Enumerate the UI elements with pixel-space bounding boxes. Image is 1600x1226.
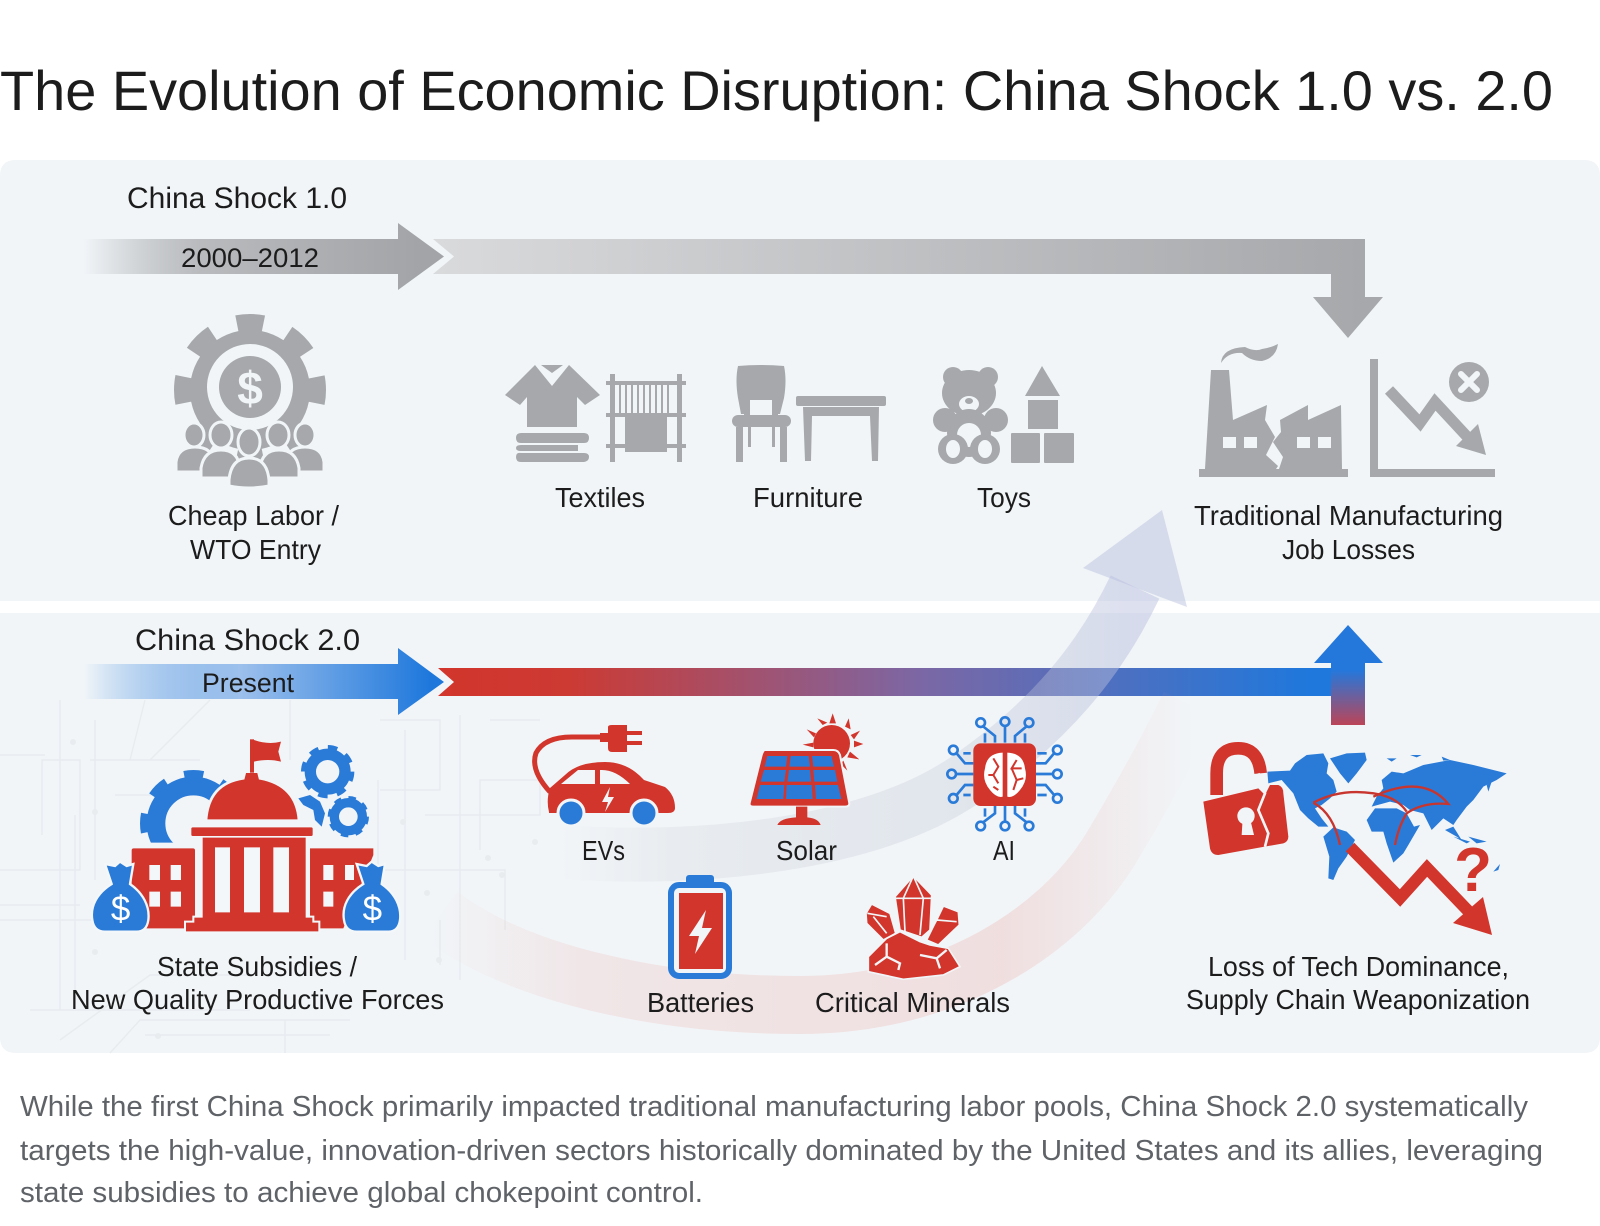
label: Loss of Tech Dominance, Supply Chain Weaponization: Loss of Tech Dominance,	[1208, 951, 1509, 982]
icon: textiles	[505, 365, 686, 462]
label: Cheap Labor / WTO Entry: Cheap Labor /	[168, 500, 339, 531]
icon: state building, gears and money bags: $	[363, 890, 382, 929]
arrow: faint red curve into tech dominance	[440, 705, 1190, 1005]
caption text: targets the high-value, innovation-driven sectors historically dominated by the United States and its allies, leveraging	[20, 1135, 1543, 1167]
icon: AI chip with brain	[947, 717, 1062, 830]
caption text: state subsidies to achieve global chokepoint control.	[20, 1177, 703, 1209]
heading: China Shock 1.0: China Shock 1.0	[127, 182, 347, 215]
label: Furniture: Furniture	[753, 482, 863, 513]
icon: falling red arrow with question mark	[1350, 836, 1492, 935]
label: Solar: Solar	[776, 835, 837, 866]
icon: falling red arrow with question mark: ?	[1454, 836, 1492, 905]
icon: solar panel and sun	[750, 713, 863, 825]
label: EVs: EVs	[582, 835, 625, 866]
arrow: 2000–2012 timeline: 2000–2012	[181, 243, 319, 273]
label: Toys: Toys	[977, 482, 1031, 513]
arrow: blue Present timeline	[84, 648, 444, 715]
icon: gear, dollar and workers	[176, 324, 324, 488]
title: The Evolution of Economic Disruption: China Shock 1.0 vs. 2.0	[0, 59, 1553, 122]
icon: electric car	[535, 725, 675, 826]
icon: battery	[671, 875, 729, 976]
label: Loss of Tech Dominance, Supply Chain Weaponization: Supply Chain Weaponization	[1186, 984, 1530, 1015]
arrow: 2000–2012 timeline	[84, 223, 444, 290]
arrow: grey band to job losses	[433, 239, 1383, 338]
icon: state building, gears and money bags: $	[111, 890, 130, 929]
icon: world map with routes	[1267, 753, 1507, 880]
heading: China Shock 2.0: China Shock 2.0	[135, 624, 360, 657]
label: Cheap Labor / WTO Entry: WTO Entry	[190, 534, 321, 565]
label: Traditional Manufacturing Job Losses: Traditional Manufacturing	[1194, 500, 1503, 531]
label: Textiles: Textiles	[555, 482, 645, 513]
label: Traditional Manufacturing Job Losses	[1194, 500, 1503, 565]
arrow: red to blue band rising to tech dominance	[438, 625, 1383, 725]
label: Batteries: Batteries	[647, 987, 754, 1018]
label: AI: AI	[993, 835, 1015, 866]
caption text	[20, 1091, 1543, 1209]
label: Present: Present	[202, 668, 294, 698]
label: Loss of Tech Dominance, Supply Chain Weaponization	[1186, 951, 1530, 1015]
panel: China Shock 1.0	[0, 160, 1600, 601]
icon: broken padlock	[1203, 748, 1288, 855]
icon: broken factory and falling chart	[1199, 344, 1495, 477]
icon: state building, gears and money bags	[92, 739, 400, 932]
arrow: curved grey-blue arrow into job losses	[560, 510, 1187, 855]
panel: China Shock 2.0	[0, 613, 1600, 1053]
label: Traditional Manufacturing Job Losses: Job Losses	[1282, 534, 1415, 565]
label: State Subsidies / New Quality Productive Forces	[71, 951, 444, 1015]
icon: chair and table	[732, 365, 886, 462]
label: State Subsidies / New Quality Productive Forces: State Subsidies /	[157, 951, 357, 982]
label: Cheap Labor / WTO Entry	[168, 500, 339, 565]
icon: gear, dollar and workers: $	[237, 362, 263, 414]
label: State Subsidies / New Quality Productive Forces: New Quality Productive Forces	[71, 984, 444, 1015]
label: Critical Minerals: Critical Minerals	[815, 987, 1010, 1018]
caption text: While the first China Shock primarily impacted traditional manufacturing labor pools, China Shock 2.0 systematically	[20, 1091, 1529, 1123]
icon: critical mineral crystals	[866, 876, 960, 979]
icon: teddy bear and blocks	[933, 366, 1074, 464]
